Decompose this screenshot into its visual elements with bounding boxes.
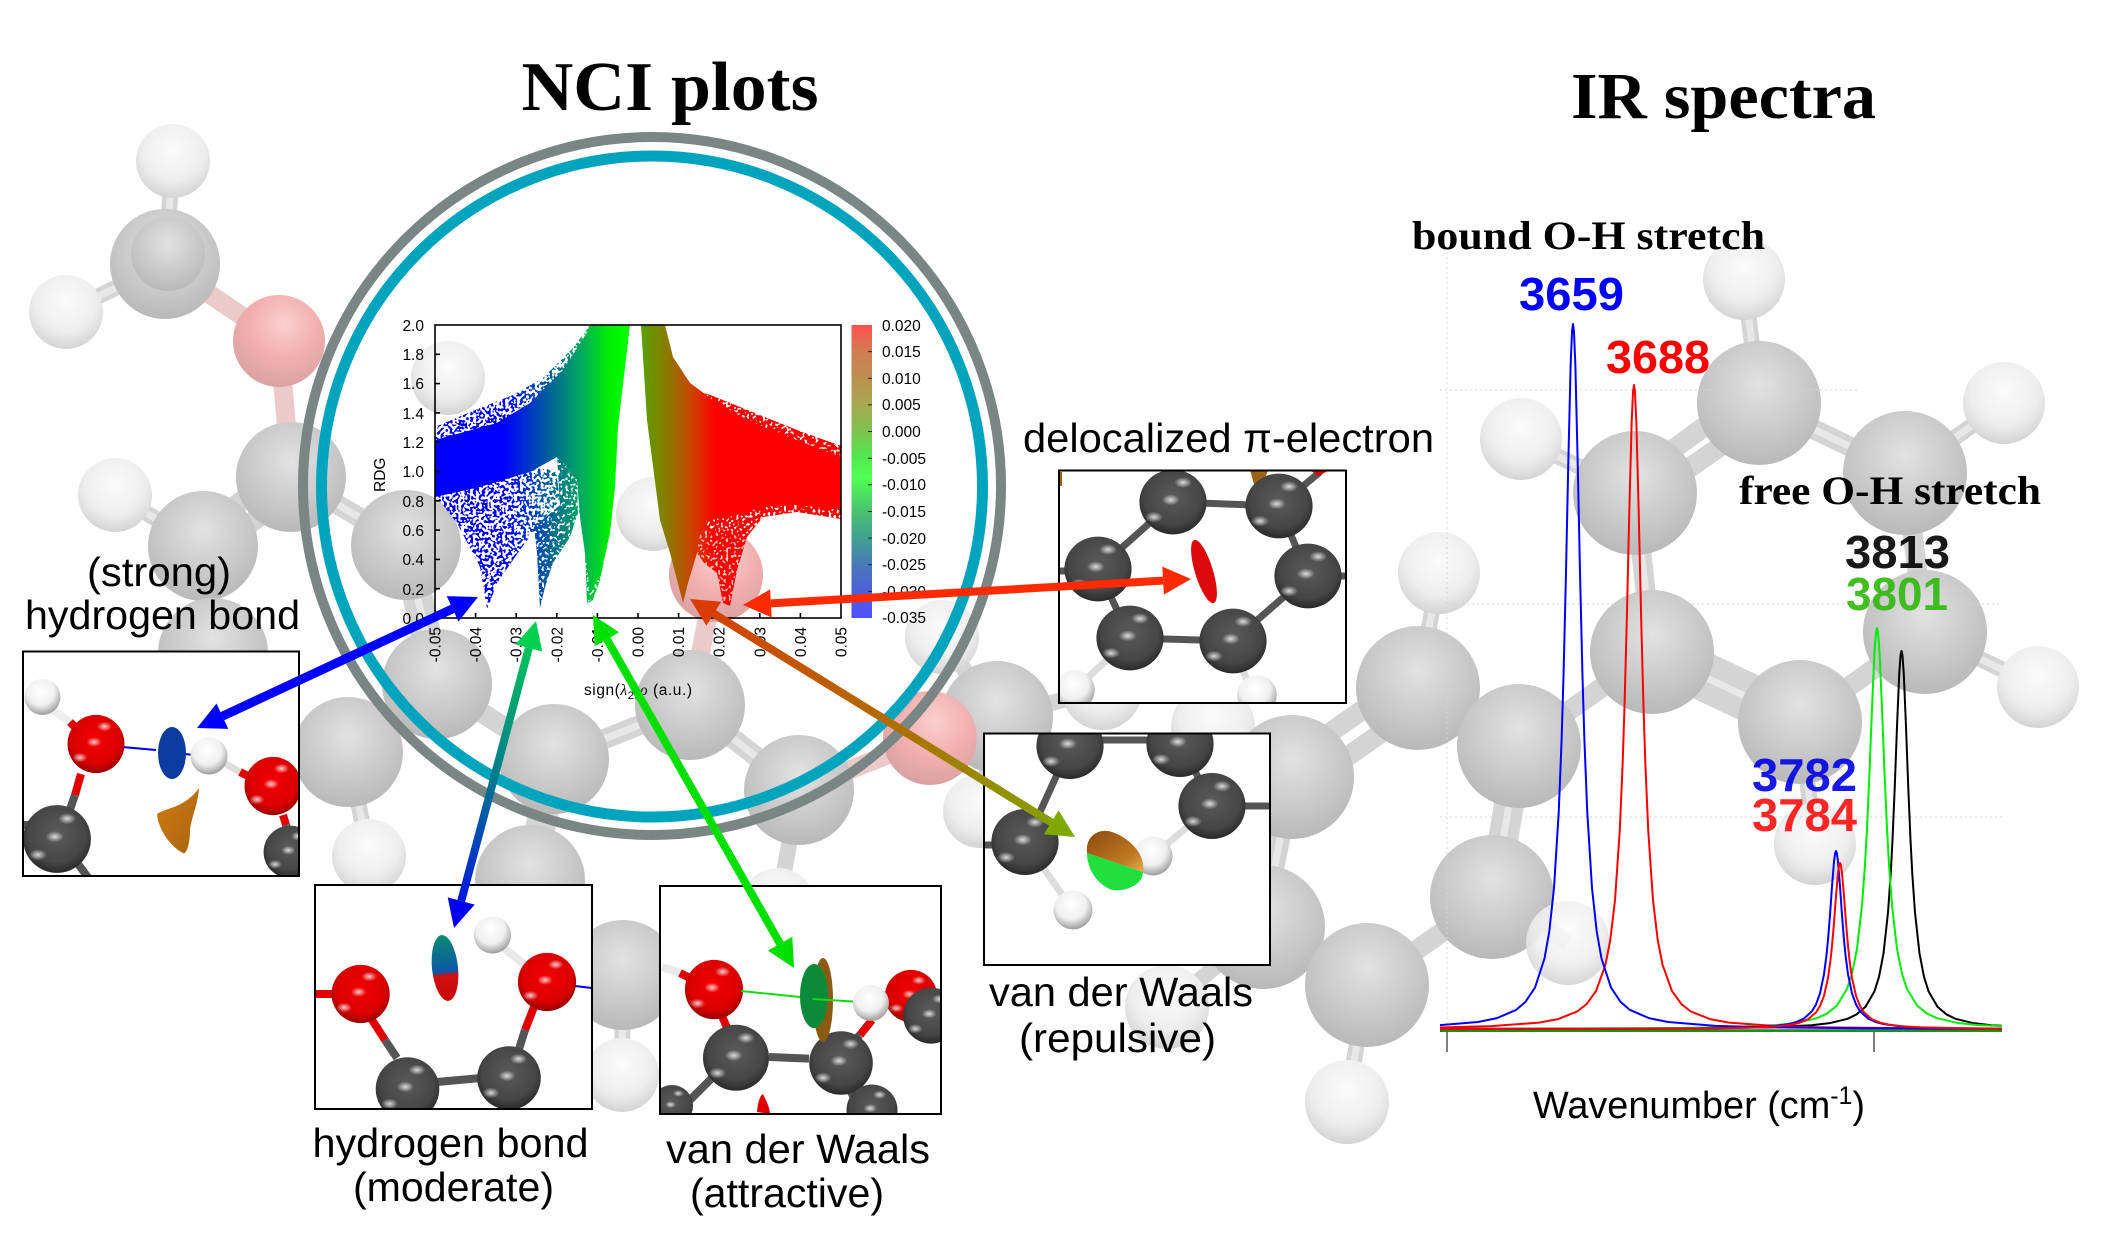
isosurface: red pi disc [1191,540,1217,604]
colour bar ticks [868,352,872,591]
magnifier circle rings [303,137,1001,835]
colour bar labels: 0.000 [882,424,921,441]
isosurface: attractive disc [800,958,833,1042]
isosurface: hydrogen bond disc [158,727,186,779]
sparse scatter points [435,325,600,610]
panel: repulsive van der Waals [984,711,1270,965]
panel: delocalized pi-electron [1055,470,1346,715]
plot frame [435,325,841,618]
peak label 3782: 3782 [1752,749,1857,801]
x axis labels: 0.03 [752,627,769,657]
label: van der Waals repulsive: van der Waals [989,969,1253,1015]
colour bar labels: 0.020 [882,318,921,335]
arrow: teal to blue, moderate hydrogen bond [448,621,542,928]
colour bar labels: -0.035 [882,610,926,627]
y axis labels: 0.2 [402,582,424,599]
label: delocalized pi-electron: delocalized π-electron [1023,415,1434,461]
y axis labels: 0.8 [402,494,424,511]
peak label 3784: 3784 [1752,789,1857,841]
label: hydrogen bond moderate [312,1120,588,1210]
arrow: red, delocalized pi-electron [743,567,1191,617]
x axis labels [428,627,850,662]
x axis labels: 0.02 [712,627,729,657]
spectrum lines [1440,323,2002,1032]
axis [1440,1030,2002,1052]
title: NCI plots: NCI plots [522,49,818,126]
panel: attractive van der Waals [659,885,942,1115]
y axis labels: 1.0 [402,464,424,481]
y axis title: RDG [372,458,389,492]
panel: strong hydrogen bond [23,652,316,880]
isosurface: orange blob [157,788,199,853]
arrow: green, attractive van der Waals [593,615,794,968]
colour bar labels: 0.005 [882,397,921,414]
arrow: orange to olive, repulsive van der Waals [690,599,1075,837]
label: strong hydrogen bond: (strong) [87,549,231,595]
label: van der Waals attractive: van der Waals [666,1126,930,1172]
x axis labels: -0.05 [428,627,444,662]
y axis labels: 0.6 [402,523,424,540]
label: van der Waals repulsive [989,969,1253,1061]
label: hydrogen bond moderate: (moderate) [353,1164,554,1210]
colour bar [852,325,872,618]
dense scatter points [534,388,841,608]
x axis title: ρ (a.u.) [640,682,692,699]
y axis labels [402,318,424,628]
y axis labels: 1.2 [402,435,424,452]
colour bar labels [882,318,926,627]
label: van der Waals attractive: (attractive) [690,1170,884,1216]
x axis title: sign(λ [584,682,627,699]
label: van der Waals repulsive: (repulsive) [1019,1015,1216,1061]
arrow: blue, strong hydrogen bond [197,596,478,729]
NCI scatter plot [372,318,926,702]
x axis labels: -0.02 [549,627,566,662]
peak label 3801: 3801 [1846,568,1948,620]
label: van der Waals attractive [666,1126,930,1216]
y axis labels: 0.4 [402,552,424,569]
x axis labels: -0.04 [468,627,485,662]
peak label 3688: 3688 [1606,331,1710,383]
y axis labels: 2.0 [402,318,424,335]
y axis labels: 1.6 [402,376,424,393]
x axis labels: 0.00 [630,627,648,657]
isosurface: moderate hydrogen bond [432,935,458,1001]
peak label 3659: 3659 [1519,268,1624,320]
x axis labels: 0.05 [834,627,850,657]
isosurface: repulsive blob [1087,831,1143,890]
label: hydrogen bond moderate: hydrogen bond [312,1120,588,1166]
colour bar labels: -0.020 [882,531,926,548]
solid scatter bands [435,325,841,603]
title: IR spectra: IR spectra [1571,60,1876,133]
colour bar labels: 0.015 [882,344,921,361]
IR spectrum chart [1440,247,2002,1052]
grid lines [1440,247,2002,1029]
x axis labels: -0.01 [590,627,607,662]
label: strong hydrogen bond: hydrogen bond [25,592,300,638]
x axis labels: 0.01 [671,627,688,657]
label: strong hydrogen bond [25,549,300,638]
colour bar labels: 0.010 [882,371,921,388]
peak label 3813: 3813 [1845,526,1950,578]
panel: moderate hydrogen bond [315,885,592,1121]
heading: free O-H stretch: free O-H stretch [1739,468,2041,513]
x axis title: wavenumber: ) [1852,1085,1865,1127]
y axis labels: 0.0 [402,611,424,628]
colour bar labels: -0.025 [882,557,926,574]
y axis labels: 1.4 [402,406,424,423]
x axis title: wavenumber: -1 [1830,1082,1852,1110]
colour bar labels: -0.010 [882,477,926,494]
x axis title: wavenumber: Wavenumber (cm [1533,1085,1831,1127]
x axis title: 2 [628,690,634,702]
y axis labels: 1.8 [402,347,424,364]
x axis title: ) [634,682,640,699]
colour bar labels: -0.005 [882,451,926,468]
x axis labels: 0.04 [793,627,810,657]
colour bar labels: -0.030 [882,584,926,601]
x axis labels: -0.03 [509,627,526,662]
colour bar labels: -0.015 [882,504,926,521]
heading: bound O-H stretch: bound O-H stretch [1412,213,1765,258]
